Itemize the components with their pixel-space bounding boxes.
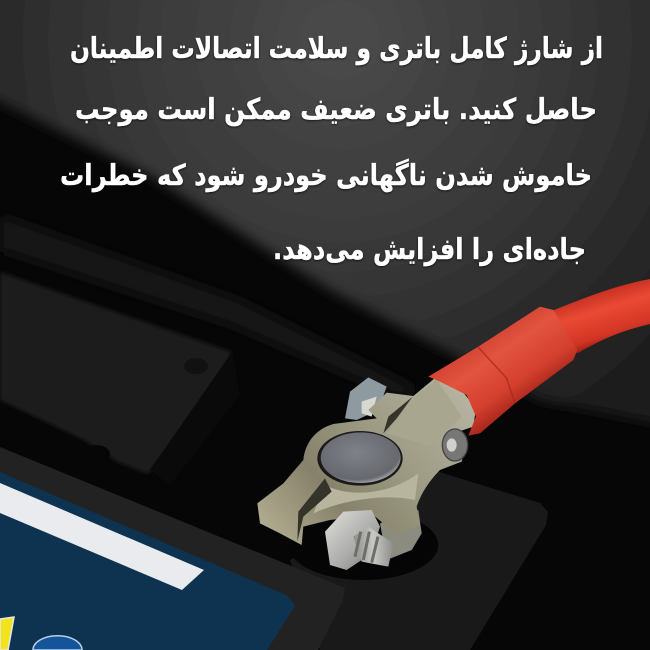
battery case right section (290, 470, 548, 650)
terminal post lead body (380, 510, 422, 560)
caption line 4: جاده‌ای را افزایش می‌دهد. (273, 232, 586, 266)
terminal post top (317, 431, 403, 486)
label blue circle icon (33, 636, 82, 650)
clamp gap shadow (297, 397, 413, 542)
side rivet (442, 429, 468, 461)
label warning icon (0, 617, 14, 650)
blue battery label (0, 472, 295, 650)
front nut (325, 510, 380, 570)
terminal base ring (294, 516, 438, 580)
background photo: dark engine bay (0, 0, 650, 428)
battery case corner (0, 447, 345, 650)
red cable (550, 278, 650, 353)
red sleeve (428, 307, 577, 436)
caption text (60, 31, 603, 266)
front bolt thread (353, 527, 393, 567)
label white strip (0, 483, 204, 590)
rear bolt (345, 377, 387, 420)
metal clamp (257, 377, 476, 545)
battery cover block upper left (0, 272, 240, 485)
battery terminal assembly (257, 278, 650, 580)
clamp lug highlight (387, 380, 462, 434)
clamp jaw highlight (313, 473, 418, 513)
